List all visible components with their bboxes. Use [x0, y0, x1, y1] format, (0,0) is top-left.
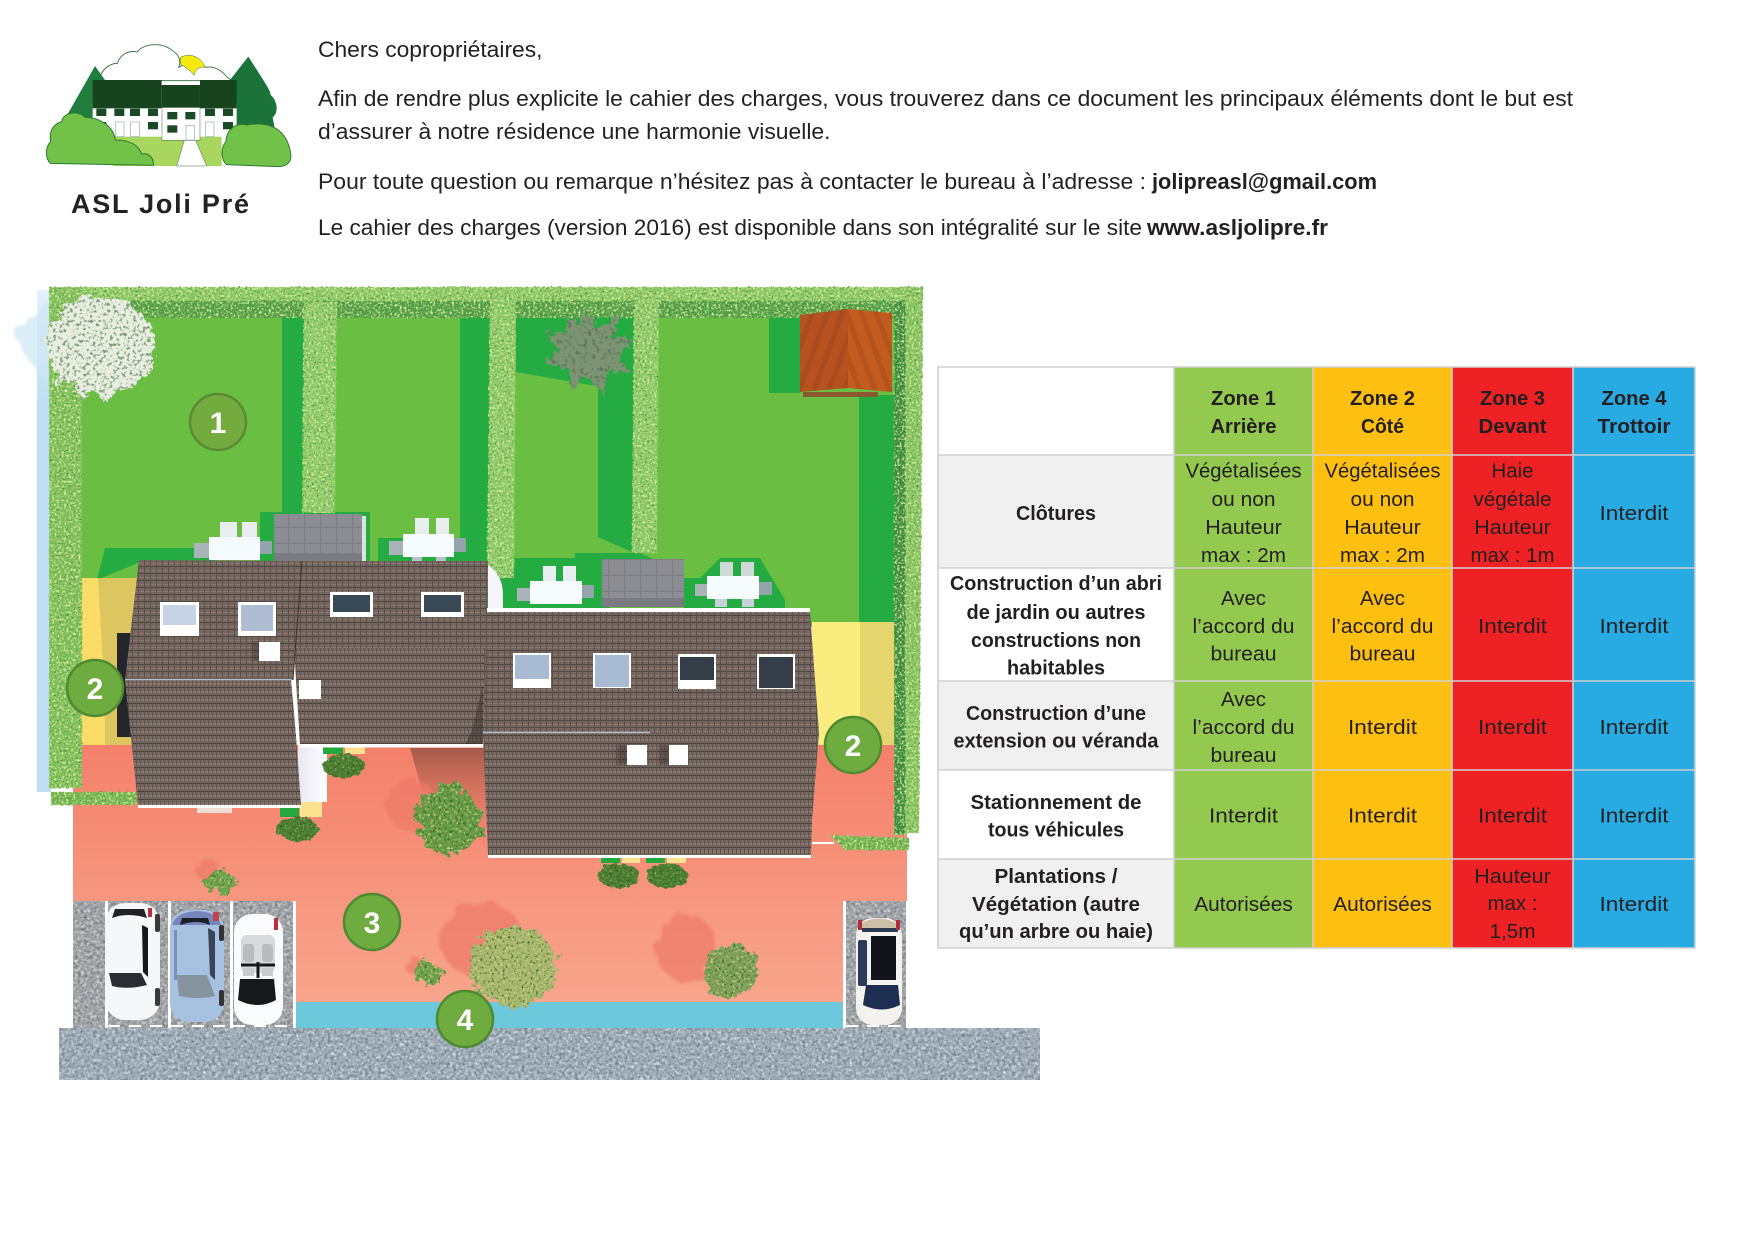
row: stationnement cells: Interdit [1600, 804, 1669, 828]
row label: stationnement [970, 792, 1142, 842]
row: extension cells: Interdit [1600, 716, 1669, 739]
row: clôtures cells: ou non [1212, 488, 1276, 511]
row: extension cells: Interdit [1348, 716, 1417, 739]
garden shed [800, 309, 892, 397]
row: clôtures cells: Hauteur [1205, 516, 1282, 539]
logo: lawn [113, 136, 222, 166]
row label: plantations: qu’un arbre ou haie) [959, 921, 1153, 943]
large bush [416, 786, 482, 854]
column header: zone 3: Zone 3 [1480, 388, 1545, 410]
roof edges [138, 608, 834, 858]
row: stationnement cells: Interdit [1478, 804, 1547, 828]
row: stationnement cells: Interdit [1348, 804, 1417, 828]
logo: cloud [99, 45, 232, 81]
column header: zone 4: Zone 4 [1602, 388, 1667, 410]
row label: abri de jardin [950, 573, 1162, 680]
column header: zone 4: Trottoir [1598, 416, 1671, 438]
intro paragraph: Afin de rendre plus explicite le cahier des charges, vous trouverez dans ce document les principaux éléments dont le but est [318, 86, 1573, 111]
row: abri de jardin cells: l’accord du [1192, 615, 1294, 638]
car 2: blue [170, 910, 224, 1022]
zone marker 4 [437, 991, 493, 1047]
contact line: Pour toute question ou remarque n’hésitez pas à contacter le bureau à l’adresse : [318, 169, 1146, 194]
logo: right bush [222, 124, 291, 167]
row: abri de jardin cells: bureau [1350, 642, 1416, 666]
column header: zone 2 [1350, 388, 1415, 438]
garden table 4 [695, 562, 772, 607]
road [59, 1028, 1040, 1080]
hedge: top [49, 287, 923, 301]
row: clôtures cells: Hauteur [1474, 516, 1551, 539]
row label: abri de jardin: habitables [1007, 658, 1105, 680]
blue halo behind left hedge [14, 290, 51, 792]
row: plantations cells: Autorisées [1333, 893, 1432, 916]
website line: Le cahier des charges (version 2016) est disponible dans son intégralité sur le site [318, 215, 1142, 240]
row: clôtures cells [1186, 460, 1669, 567]
row: abri de jardin cells: Interdit [1478, 615, 1547, 638]
row: extension cells: l’accord du [1192, 716, 1294, 739]
row: abri de jardin cells: Avec [1360, 587, 1405, 610]
zone marker 2 right: 2 [845, 730, 861, 763]
front bush 1 [598, 864, 640, 888]
zone marker 4: 4 [457, 1004, 474, 1037]
row: clôtures cells: Végétalisées [1186, 460, 1302, 482]
hedges [49, 287, 923, 850]
zone marker 1 [190, 394, 246, 450]
logo: ASL Joli Pré [46, 45, 291, 219]
row label: plantations: Plantations / [994, 866, 1118, 888]
hedge: divider 2 [487, 300, 516, 578]
row label: stationnement: tous véhicules [988, 820, 1124, 842]
house [125, 560, 834, 863]
row label: abri de jardin: de jardin ou autres [966, 602, 1146, 624]
table cell backgrounds [938, 367, 1695, 948]
round bush right [703, 944, 757, 998]
plant shadows [196, 780, 716, 982]
row label: plantations [959, 866, 1153, 943]
skylights: left wing [160, 602, 276, 636]
row label: extension ou véranda [954, 703, 1159, 752]
intro paragraph: d’assurer à notre résidence une harmonie visuelle. [318, 119, 830, 144]
column header: zone 3 [1478, 388, 1547, 438]
parking left [73, 901, 296, 1028]
shrubs and trees [204, 754, 757, 1006]
roof: left wing upper [125, 560, 302, 680]
row: clôtures cells: Végétalisées [1324, 460, 1440, 482]
bins and hedge near entrance [280, 746, 686, 863]
logo illustration [46, 45, 291, 167]
hedge inner faces [49, 300, 906, 835]
column header: zone 2: Zone 2 [1350, 388, 1415, 410]
zone marker 2 left [67, 660, 123, 716]
lawn shadows [97, 315, 896, 627]
greeting: Chers copropriétaires, [318, 37, 542, 62]
row: plantations cells [1194, 865, 1669, 943]
logo: right tree [230, 57, 277, 130]
car 3: white convertible [234, 914, 283, 1025]
row label: plantations: Végétation (autre [972, 894, 1140, 916]
row label: stationnement: Stationnement de [970, 792, 1142, 814]
blossom tree [46, 296, 154, 396]
bush by entrance [277, 817, 319, 841]
row label: clôtures: Clôtures [1016, 503, 1096, 525]
logo: house [93, 80, 237, 140]
row: plantations cells: Hauteur [1474, 865, 1551, 888]
zone marker 3: 3 [364, 907, 380, 940]
zone 2: right side yellow [812, 622, 905, 845]
row: stationnement cells [1209, 804, 1669, 828]
row: abri de jardin cells: bureau [1210, 642, 1276, 666]
hedge: divider 3 [632, 301, 659, 553]
bush by wall [323, 754, 365, 778]
logo: left pine [59, 66, 107, 130]
dark green tree [543, 308, 636, 394]
column header: zone 2: Côté [1361, 416, 1404, 438]
website line: www.asljolipre.fr [1146, 215, 1328, 240]
hedge: front left stub [51, 792, 137, 805]
zone marker 1: 1 [210, 407, 226, 440]
light tree [470, 926, 558, 1006]
column header: zone 3: Devant [1478, 416, 1547, 438]
logo: sun [180, 55, 205, 75]
zone 1: rear lawn [80, 315, 896, 627]
row: plantations cells: Autorisées [1194, 893, 1293, 916]
terrace 1 [274, 514, 366, 561]
row: clôtures cells: Haie [1492, 460, 1534, 482]
zone marker 2 right [825, 717, 881, 773]
chimneys [252, 642, 688, 765]
skylights: middle [330, 592, 464, 617]
logo: path [177, 140, 207, 166]
roof shadow [465, 685, 483, 745]
table grid [938, 367, 1695, 948]
rules table [938, 367, 1695, 948]
row: clôtures cells: ou non [1350, 488, 1414, 511]
hedge: front right stub [830, 835, 909, 850]
row: abri de jardin cells [1192, 587, 1669, 666]
row: plantations cells: max : [1488, 892, 1538, 915]
white wall between wings [298, 745, 327, 802]
column header: zone 1 [1210, 388, 1276, 438]
small plant front left [204, 871, 236, 893]
row: extension cells [1192, 688, 1669, 767]
roof: right block lower [483, 733, 819, 855]
row: clôtures cells: max : 1m [1470, 544, 1554, 567]
row: clôtures cells: végétale [1474, 488, 1552, 511]
row: stationnement cells: Interdit [1209, 804, 1278, 828]
row label: extension ou véranda: extension ou véranda [954, 730, 1159, 752]
row: clôtures cells: max : 2m [1201, 544, 1286, 567]
zone 4: cyan sidewalk strip [295, 1002, 843, 1028]
row: plantations cells: Interdit [1600, 893, 1669, 916]
row label: extension ou véranda: Construction d’une [966, 703, 1146, 725]
row: abri de jardin cells: Avec [1221, 587, 1266, 610]
small plant centre [413, 962, 443, 984]
row: abri de jardin cells: l’accord du [1332, 615, 1434, 638]
row: extension cells: Avec [1221, 688, 1266, 711]
site plan [14, 287, 1040, 1080]
row label: abri de jardin: constructions non [971, 630, 1141, 652]
roof: left wing lower [125, 680, 301, 805]
logo: left bush [46, 113, 153, 165]
intro text [318, 37, 1573, 240]
column header: zone 1: Zone 1 [1211, 388, 1276, 410]
row: abri de jardin cells: Interdit [1600, 615, 1669, 638]
row: extension cells: Interdit [1478, 716, 1547, 739]
parking right [843, 901, 906, 1028]
hedge: left [49, 287, 82, 788]
zone 3: front salmon area [73, 745, 907, 1002]
row: plantations cells: 1,5m [1490, 920, 1536, 943]
upper white wall [488, 565, 503, 609]
front bush 2 [646, 864, 688, 888]
roof: middle section [292, 561, 488, 648]
contact line: jolipreasl@gmail.com [1151, 169, 1377, 194]
garden table 3 [517, 566, 594, 604]
row: clôtures cells: Hauteur [1344, 516, 1421, 539]
row: clôtures cells: Interdit [1600, 502, 1669, 525]
row: clôtures cells: max : 2m [1340, 544, 1425, 567]
column header: zone 4 [1598, 388, 1671, 438]
car 1: white [105, 903, 160, 1020]
column header: zone 1: Arrière [1210, 416, 1276, 438]
garden table 1 [194, 522, 272, 560]
terrace 2 [602, 559, 684, 607]
zone 2: left side yellow [80, 578, 140, 793]
hedge: right [905, 288, 923, 833]
row: extension cells: bureau [1210, 744, 1276, 767]
logo name: ASL Joli Pré [71, 189, 249, 219]
hedge: divider 1 [302, 302, 337, 513]
zone marker 2 left: 2 [87, 673, 103, 706]
roof: right block upper [483, 612, 819, 733]
skylights: right block [513, 653, 795, 689]
intro paragraph [318, 86, 1573, 144]
garden table 2 [389, 518, 466, 561]
zone marker 3 [344, 894, 400, 950]
row label: abri de jardin: Construction d’un abri [950, 573, 1162, 595]
car 4: dark roof [856, 918, 902, 1025]
